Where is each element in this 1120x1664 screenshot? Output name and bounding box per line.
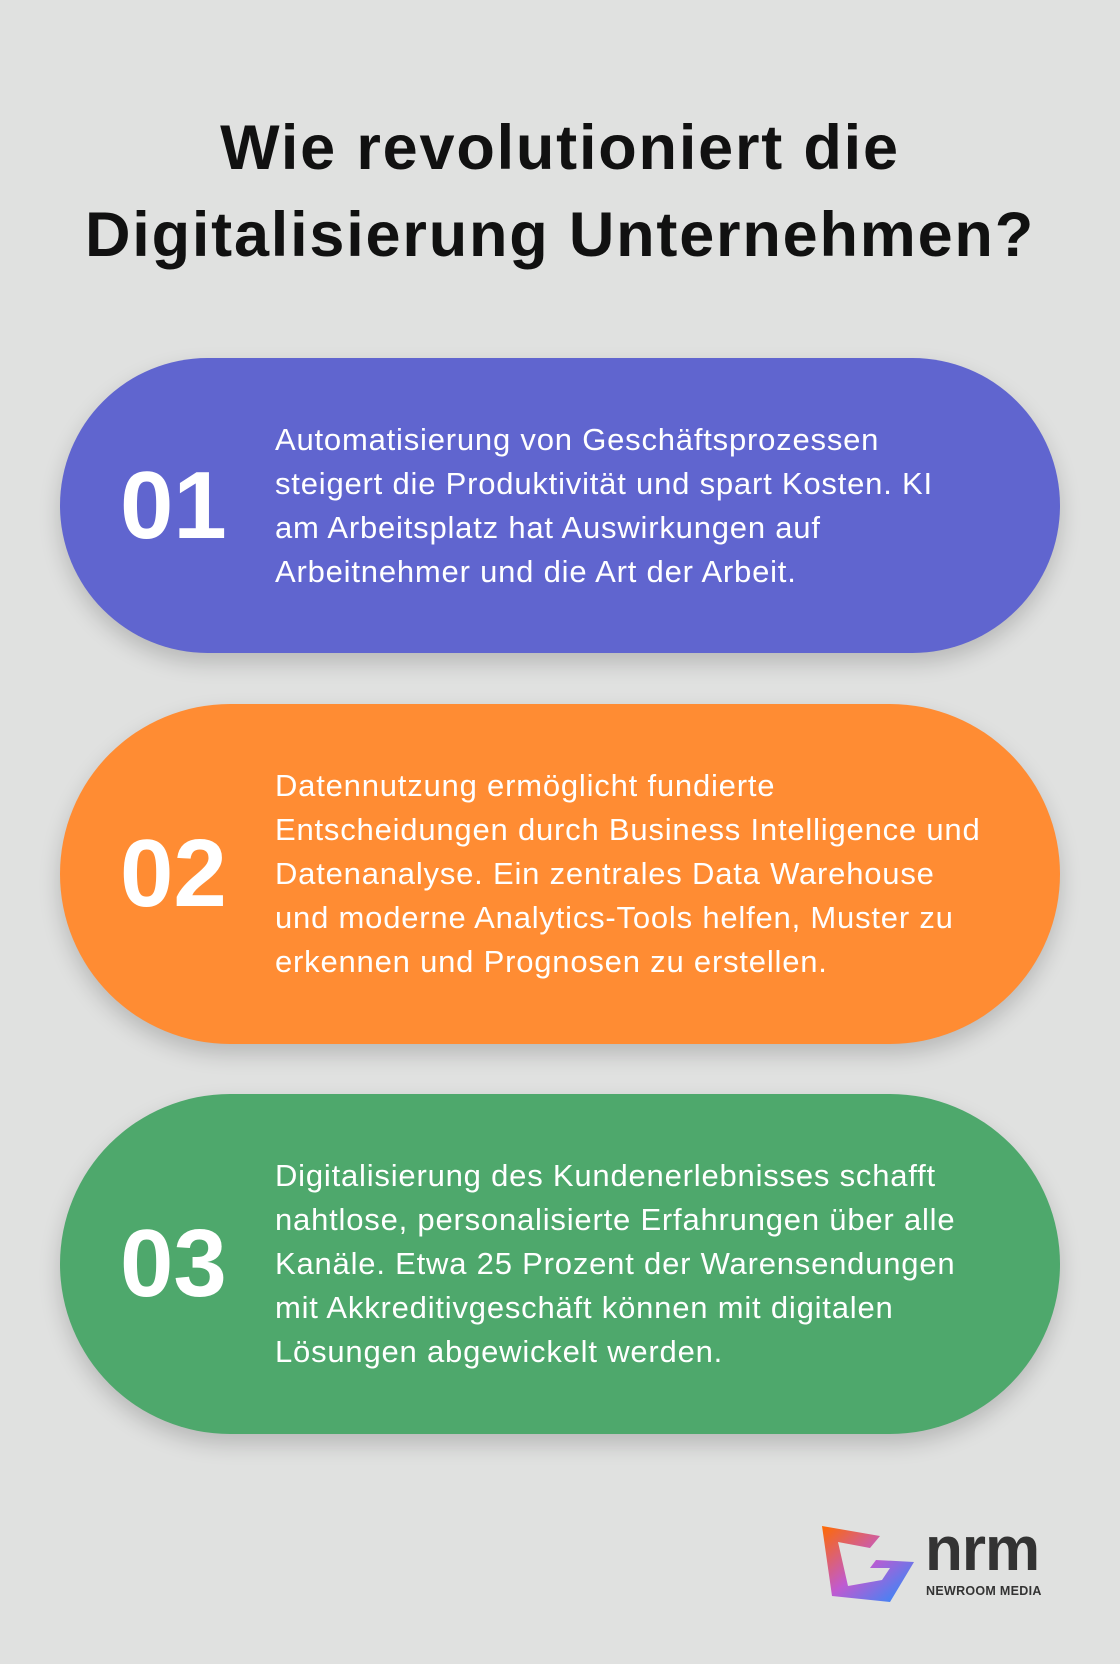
text 02: erkennen und Prognosen zu erstellen. (275, 944, 828, 979)
text 01: Arbeitnehmer und die Art der Arbeit. (275, 554, 797, 588)
title: Wie revolutioniert die (220, 113, 900, 183)
logo (822, 1515, 1042, 1602)
text 03: nahtlose, personalisierte Erfahrungen über alle (275, 1202, 955, 1237)
text 02: Datenanalyse. Ein zentrales Data Warehouse (275, 856, 935, 891)
text 02: Datennutzung ermöglicht fundierte (275, 768, 775, 803)
text 02: und moderne Analytics-Tools helfen, Muster zu (275, 900, 954, 935)
logo: NEWROOM MEDIA (926, 1584, 1042, 1598)
title: Digitalisierung Unternehmen? (85, 200, 1035, 270)
number 03: 03 (120, 1210, 227, 1317)
text 02: Entscheidungen durch Business Intelligence und (275, 812, 980, 847)
text 01: Automatisierung von Geschäftsprozessen (275, 422, 879, 456)
text 03: Lösungen abgewickelt werden. (275, 1334, 723, 1369)
text 01: am Arbeitsplatz hat Auswirkungen auf (275, 510, 821, 544)
text 01 (275, 422, 933, 588)
text 03 (275, 1158, 955, 1369)
title (85, 113, 1035, 270)
panel: 02 (60, 704, 1060, 1044)
text 03: mit Akkreditivgeschäft können mit digitalen (275, 1290, 894, 1325)
panel: 03 (60, 1094, 1060, 1434)
number 01: 01 (120, 452, 227, 558)
number 02: 02 (120, 820, 227, 927)
text 01: steigert die Produktivität und spart Kosten. KI (275, 466, 933, 500)
panel: 01 (60, 358, 1060, 653)
icon: logo mark (822, 1526, 914, 1602)
text 03: Digitalisierung des Kundenerlebnisses schafft (275, 1158, 936, 1193)
text 02 (275, 768, 980, 979)
logo text: nrm (925, 1515, 1039, 1584)
text 03: Kanäle. Etwa 25 Prozent der Warensendungen (275, 1246, 955, 1281)
